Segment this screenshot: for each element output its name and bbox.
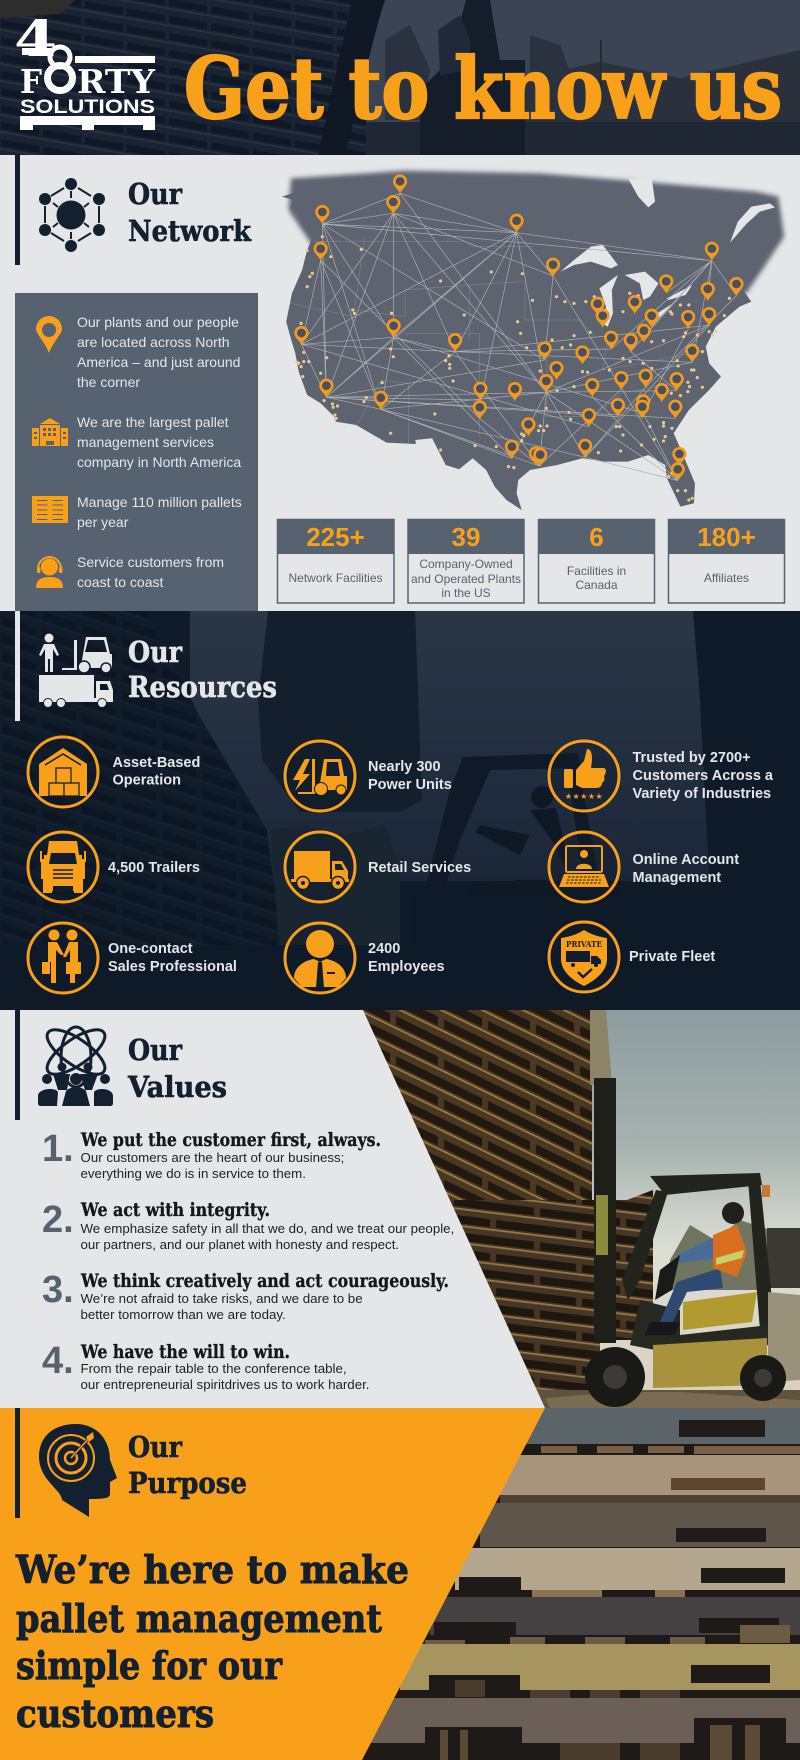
value 3: We think creatively and act courageously. — [80, 1271, 449, 1292]
heading: our values: Our — [128, 1033, 183, 1067]
header photo background — [0, 0, 800, 155]
icon: network — [39, 178, 105, 252]
text: coast to coast: coast to coast — [77, 574, 163, 590]
icon: building — [32, 418, 68, 446]
values photo background — [360, 1010, 800, 1408]
purpose statement: customers — [16, 1691, 214, 1736]
item: retail services — [285, 832, 471, 902]
values light panel — [0, 1010, 545, 1408]
purpose statement: pallet management — [16, 1596, 382, 1641]
panel: network facts — [15, 293, 258, 612]
panel: our network — [0, 155, 800, 612]
icon: team with atom — [38, 1022, 113, 1106]
purpose statement — [15, 1547, 409, 1736]
panel: our resources — [0, 611, 800, 1010]
network lines — [301, 193, 737, 481]
stat: facilities in canada: 6 — [589, 522, 604, 552]
heading: our resources: Resources — [128, 670, 277, 704]
item: online account management: Management — [632, 870, 721, 886]
value 2: We act with integrity. — [80, 1200, 270, 1221]
resources photo background — [0, 611, 800, 1010]
icon: laptop — [549, 832, 619, 902]
stat: facilities in canada — [538, 519, 655, 603]
item: 2400 employees: Employees — [368, 959, 445, 975]
icon: warehouse — [28, 737, 98, 807]
item: trusted customers: Customers Across a — [632, 768, 774, 784]
value 1: everything we do is in service to them. — [80, 1166, 306, 1181]
item: trusted customers: Variety of Industries — [632, 786, 771, 802]
value 3: better tomorrow than we are today. — [80, 1307, 286, 1322]
icon: pallets — [32, 496, 68, 523]
icon: person, forklift and truck — [39, 634, 113, 708]
logo: 48forty solutions — [14, 9, 155, 130]
logo: 48forty solutions: F — [20, 62, 42, 101]
value 4: our entrepreneurial spiritdrives us to work harder. — [80, 1377, 369, 1392]
text: coast to coast: Service customers from — [77, 554, 224, 570]
heading: our purpose: Purpose — [128, 1466, 247, 1500]
icon: thumbs up: ★★★★★ — [565, 792, 603, 801]
value 2: 2. — [42, 1199, 74, 1241]
stat: company-owned plants: 39 — [452, 522, 480, 552]
icon: delivery truck — [285, 832, 355, 902]
item: asset-based operation: Operation — [112, 772, 181, 788]
orange panel — [0, 1408, 545, 1760]
purpose statement: simple for our — [16, 1643, 283, 1688]
text: located across north america: Our plants and our people — [77, 314, 239, 330]
item: trusted customers: Trusted by 2700+ — [632, 750, 751, 766]
heading: our resources: Our — [128, 635, 183, 669]
value 2 — [42, 1199, 454, 1252]
item: retail services: Retail Services — [368, 860, 471, 876]
item: one-contact sales professional: One-contact — [108, 941, 193, 957]
text: located across north america: are located across North — [77, 334, 230, 350]
value 2: We emphasize safety in all that we do, and we treat our people, — [80, 1221, 454, 1236]
stat: company-owned plants: in the US — [441, 586, 491, 600]
panel: header — [0, 0, 800, 155]
icon: private fleet shield: PRIVATE — [566, 939, 602, 949]
panel: our values — [0, 1010, 800, 1408]
item: 2400 employees — [285, 923, 445, 993]
icon: handshake — [28, 923, 98, 993]
map of north america — [282, 171, 784, 510]
item: private fleet: Private Fleet — [629, 949, 715, 965]
stat: company-owned plants — [408, 519, 524, 603]
value 4: 4. — [42, 1340, 74, 1382]
stat: affiliates: Affiliates — [704, 571, 749, 585]
item: 4,500 trailers: 4,500 Trailers — [108, 860, 200, 876]
logo: 48forty solutions: SOLUTIONS — [20, 96, 155, 118]
purpose statement: We’re here to make — [15, 1547, 409, 1592]
value 3 — [42, 1269, 449, 1322]
heading: our purpose — [128, 1430, 247, 1500]
heading: our values: Values — [127, 1070, 227, 1104]
icon: electric forklift — [285, 741, 355, 811]
stat: network facilities — [277, 519, 394, 603]
value 1: 1. — [42, 1128, 74, 1170]
stat: company-owned plants: Company-Owned — [419, 557, 513, 571]
icon: pin — [36, 316, 62, 353]
heading: our values — [127, 1033, 227, 1104]
item: one-contact sales professional — [28, 923, 237, 993]
heading: our network: Network — [128, 214, 252, 248]
heading: our resources — [128, 635, 277, 704]
item: nearly 300 power units — [285, 741, 452, 811]
item: nearly 300 power units: Power Units — [368, 777, 452, 793]
item: 2400 employees: 2400 — [368, 941, 400, 957]
stat: network facilities: 225+ — [306, 522, 365, 552]
heading: our network: Our — [128, 177, 183, 211]
icon: service agent — [36, 557, 63, 588]
item: one-contact sales professional: Sales Professional — [108, 959, 237, 975]
value 2: our partners, and our planet with honesty and respect. — [80, 1237, 399, 1252]
icon: private fleet shield — [549, 922, 619, 992]
item: online account management — [549, 832, 739, 902]
value 4: From the repair table to the conference table, — [80, 1361, 347, 1376]
icon: head with target — [39, 1424, 117, 1517]
item: nearly 300 power units: Nearly 300 — [368, 759, 441, 775]
value 4 — [42, 1340, 369, 1392]
value 1: Our customers are the heart of our business; — [80, 1150, 344, 1165]
value 1 — [42, 1128, 381, 1181]
purpose photo: stacked pallets — [340, 1408, 800, 1760]
item: private fleet — [549, 922, 715, 992]
facility dots — [297, 237, 729, 500]
text: located across north america: the corner — [77, 374, 140, 390]
heading: our purpose: Our — [128, 1430, 183, 1464]
item: asset-based operation: Asset-Based — [112, 755, 200, 771]
heading: our network — [128, 177, 252, 248]
text: 110 million pallets: Manage 110 million pallets — [77, 494, 242, 510]
value 3: 3. — [42, 1269, 74, 1311]
value 4: We have the will to win. — [80, 1342, 290, 1363]
value 3: We’re not afraid to take risks, and we dare to be — [80, 1291, 363, 1306]
text: largest pallet company: company in North America — [77, 454, 241, 470]
stat: company-owned plants: and Operated Plants — [411, 572, 521, 586]
stat: facilities in canada: Canada — [575, 578, 618, 592]
text: largest pallet company: management services — [77, 434, 214, 450]
stat: network facilities: Network Facilities — [288, 571, 383, 585]
logo: 48forty solutions: 4 — [14, 9, 57, 68]
text: located across north america: America – and just around — [77, 354, 240, 370]
text: 110 million pallets: per year — [77, 514, 129, 530]
value 1: We put the customer first, always. — [80, 1130, 381, 1151]
stat: facilities in canada: Facilities in — [567, 564, 626, 578]
item: asset-based operation — [28, 737, 200, 807]
icon: truck front — [28, 832, 98, 902]
item: online account management: Online Account — [632, 852, 739, 868]
text: largest pallet company: We are the largest pallet — [77, 414, 229, 430]
icon: employee — [285, 923, 355, 993]
lakes and bays — [561, 178, 775, 327]
stat: affiliates: 180+ — [697, 522, 756, 552]
icon: thumbs up — [549, 741, 619, 811]
logo: 48forty solutions: RTY — [77, 62, 155, 101]
stat: affiliates — [668, 519, 785, 603]
item: trusted customers — [549, 741, 774, 811]
location pins — [294, 174, 744, 481]
panel: our purpose — [0, 1408, 800, 1760]
item: 4,500 trailers — [28, 832, 200, 902]
